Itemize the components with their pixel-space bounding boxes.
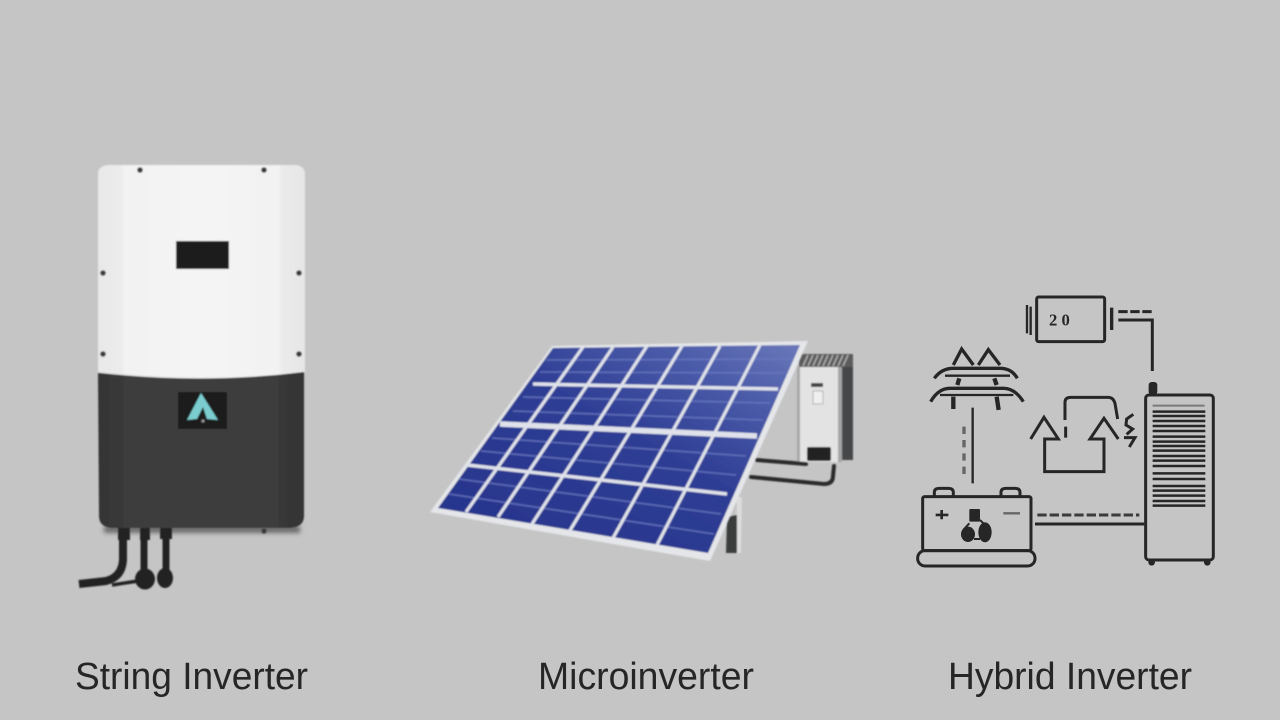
grid to battery lines [964, 408, 973, 483]
brand logo badge [178, 392, 227, 429]
hybrid inverter cabinet [1146, 382, 1213, 566]
label: hybrid inverter: Hybrid Inverter [948, 656, 1192, 698]
hybrid inverter system diagram [918, 297, 1213, 566]
string inverter illustration [79, 165, 305, 590]
connecting cables [751, 460, 834, 484]
enclosure white upper cover [98, 165, 305, 378]
cables and connectors [79, 528, 173, 590]
cell stripes [449, 359, 793, 534]
enclosure dark lower cover [98, 372, 304, 528]
energy flow arrows [1031, 397, 1118, 472]
microinverter solar illustration [430, 341, 853, 561]
current symbol [1124, 414, 1135, 447]
monitor link lines [1118, 312, 1154, 371]
display screen [176, 241, 229, 269]
panel grid lines [466, 345, 778, 545]
panel frame [430, 341, 808, 561]
monitor unit: 2 0 [1049, 311, 1070, 330]
battery icon [918, 488, 1035, 566]
label: string inverter: String Inverter [75, 656, 308, 698]
microinverter unit [797, 354, 853, 462]
label: microinverter: Microinverter [538, 656, 754, 698]
monitor unit [1027, 297, 1112, 342]
photovoltaic cell field [438, 345, 800, 553]
enclosure shadow [104, 526, 300, 533]
battery to inverter lines [1035, 515, 1144, 524]
mounting screws [100, 167, 302, 534]
grid pylon icon [931, 349, 1023, 410]
support leg [726, 497, 742, 553]
